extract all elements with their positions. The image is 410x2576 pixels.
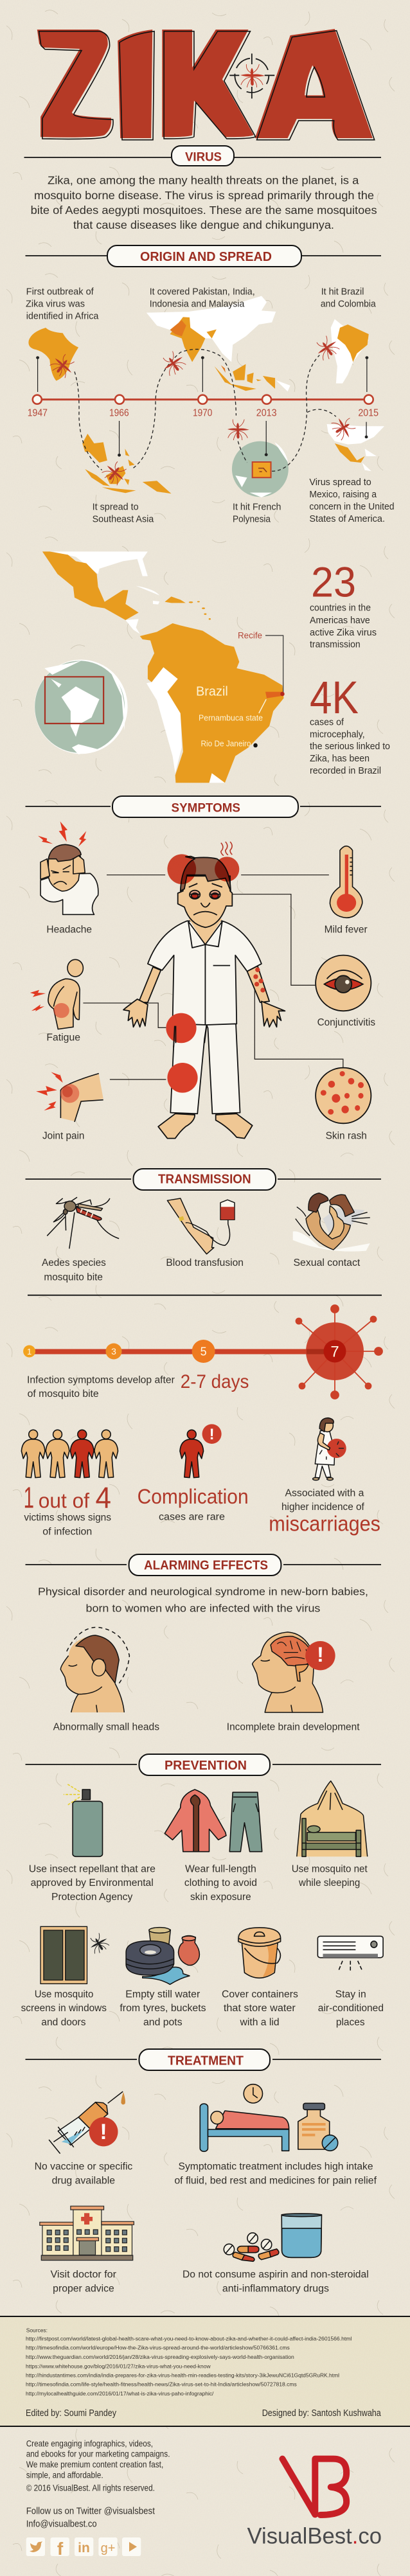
icon: repellent spray [64, 1784, 103, 1856]
panel: Americas map and stats [35, 551, 390, 783]
shirt [148, 921, 262, 1025]
stat: 23 countries: countries in the [310, 603, 371, 614]
panel: symptoms [26, 796, 381, 1142]
arrow: dashed spread path [75, 350, 336, 471]
map: South America [331, 319, 369, 384]
icon: window screen [40, 1926, 111, 1984]
text: treatment row 1: Symptomatic treatment includes high intake [179, 2162, 373, 2172]
text: map labels: Rio De Janeiro [201, 739, 251, 749]
text: miscarriages: higher incidence of [281, 1502, 364, 1513]
text: prevention row 1: while sleeping [298, 1878, 360, 1888]
text: timeline captions: It hit Brazil [321, 287, 364, 297]
text: timeline captions: Zika virus was [26, 299, 85, 309]
text: symptom labels: Joint pain [42, 1131, 84, 1142]
text block: VisualBest about: and ebooks for your marketing campaigns. [26, 2449, 170, 2459]
text: incubation period: of mosquito bite [28, 1389, 99, 1399]
text: timeline captions [26, 287, 395, 524]
text: credits: Edited by: Soumi Pandey [26, 2408, 116, 2419]
text: map labels: Pernambuca state [199, 713, 263, 723]
timeline: years axis [28, 395, 379, 419]
icon: pills and water glass [224, 2214, 321, 2261]
arms [123, 966, 285, 1027]
feet [158, 1114, 253, 1139]
stat: 4K cases: cases of [310, 717, 344, 727]
stat: 4K cases: the serious linked to [310, 742, 390, 752]
icon: syringe with alert: ! [100, 2120, 107, 2144]
text: 1 out of 4 [24, 1481, 111, 1537]
icon: Aedes mosquito [47, 1197, 119, 1248]
text: credits [26, 2408, 381, 2419]
text: prevention row 2 [21, 1989, 384, 2028]
text: prevention row 2: air-conditioned [318, 2003, 384, 2014]
map: Africa [28, 328, 78, 381]
text: prevention row 2: places [336, 2017, 365, 2028]
text block: virus intro: that cause diseases like dengue and chikungunya. [73, 218, 334, 231]
face lines [189, 884, 222, 915]
text: symptom labels [42, 925, 375, 1142]
text: timeline captions: States of America. [309, 514, 385, 524]
text block: sources: http://www.theguardian.com/world/2016/jan/28/zika-virus-spreading-explosively-says-world-health-organisation [26, 2354, 294, 2360]
text: transmission labels: Aedes species [42, 1257, 106, 1268]
text block: virus intro: bite of Aedes aegypti mosquitoes. These are the same mosquitoes [31, 204, 377, 217]
text: treatment row 2: anti-inflammatory drugs [222, 2284, 329, 2295]
text block: VisualBest about: Info@visualbest.co [26, 2519, 97, 2530]
heading: virus: VIRUS [185, 150, 222, 164]
text: prevention row 2: Stay in [335, 1989, 366, 2000]
text block: sources: http://firstpost.com/world/latest-global-health-scare-what-you-need-to-know-about-zika-and-whether-it-could-affect-india-2601566.html [26, 2335, 352, 2341]
stat: 4K cases: recorded in Brazil [310, 766, 381, 776]
text: prevention row 2: with a lid [239, 2017, 280, 2028]
text: treatment row 2: Do not consume aspirin and non-steroidal [183, 2269, 369, 2280]
icon: red eye [316, 955, 371, 1011]
icon: bed rest and medicine [200, 2084, 338, 2151]
text: prevention row 1: approved by Environmental [31, 1878, 154, 1888]
text block: sources: https://www.whitehouse.gov/blog/2016/01/27/zika-virus-what-you-need-know [26, 2363, 211, 2369]
text: map labels: Recife [238, 630, 262, 640]
text block: sources: http://timesofindia.com/life-style/health-fitness/health-news/Zika-virus-set-to-hit-India/articleshow/50727818.cms [26, 2381, 297, 2388]
heading: transmission: TRANSMISSION [158, 1173, 251, 1187]
stat: 23 countries: Americas have [310, 616, 370, 626]
heading: treatment: TREATMENT [168, 2054, 244, 2068]
stat: 23 countries [310, 558, 377, 650]
text: 1 out of 4: out of [39, 1489, 89, 1513]
icon: baby with underdeveloped brain: ! [317, 1643, 324, 1666]
text: transmission labels: Blood transfusion [166, 1257, 244, 1268]
text block: VisualBest about [26, 2438, 170, 2530]
stat: 23 countries: active Zika virus [310, 628, 377, 638]
text: miscarriages: Associated with a [285, 1488, 364, 1498]
icons: social media: f [57, 2539, 64, 2559]
text: transmission labels [42, 1257, 361, 1283]
icon: syringe with alert [49, 2092, 125, 2154]
text: 1 out of 4: victims shows signs [24, 1513, 111, 1523]
text: miscarriages [269, 1488, 380, 1536]
icon: pregnant woman [313, 1418, 346, 1480]
icon: headache [38, 821, 98, 914]
text block: sources: Sources: [26, 2327, 48, 2333]
text: symptom labels: Conjunctivitis [317, 1017, 375, 1028]
text block: sources: http://hindustantimes.com/india/india-prepares-for-zika-virus-health-min-readies-testing-kits/story-3ikJewuNCi61Gqtd5GRuRK.html [26, 2372, 339, 2378]
eyes [190, 891, 220, 899]
timeline stems [38, 358, 367, 455]
text: timeline captions: and Colombia [321, 299, 377, 309]
text: prevention row 2: from tyres, buckets [120, 2003, 206, 2014]
text: miscarriages: miscarriages [269, 1512, 380, 1536]
logo: VB mark [282, 2459, 346, 2515]
text: symptom labels: Fatigue [46, 1032, 80, 1043]
text: timeline captions: Mexico, raising a [309, 490, 377, 500]
title: ZIKA lettering [37, 29, 375, 140]
icon: crosshair with mosquito [229, 53, 274, 98]
text: prevention row 1: clothing to avoid [184, 1878, 257, 1888]
icons: social media [26, 2537, 141, 2559]
icon: person with alert [180, 1424, 222, 1478]
panel: treatment [26, 2049, 381, 2295]
text: incubation period [27, 1371, 249, 1399]
icon: thermometer [330, 846, 362, 918]
timeline: years axis: 1970 [193, 408, 212, 419]
text: complication [138, 1485, 249, 1523]
text block: VisualBest about: Create engaging infographics, videos, [26, 2438, 153, 2448]
text block: virus intro: mosquito borne disease. The virus is spread primarily through the [34, 189, 374, 202]
text: treatment row 1 [35, 2162, 377, 2186]
text: map labels [196, 630, 263, 749]
text: transmission labels: Sexual contact [293, 1257, 361, 1268]
text block: effects intro: born to women who are infected with the virus [86, 1602, 320, 1614]
text: complication: Complication [138, 1485, 249, 1508]
map: North America [327, 424, 384, 471]
icon: baby with underdeveloped brain [253, 1632, 335, 1712]
text: 1 out of 4: 1 [24, 1481, 34, 1515]
icon: mosquito net over bed [297, 1781, 368, 1856]
text block: VisualBest about: © 2016 VisualBest. All rights reserved. [26, 2483, 155, 2493]
illustration: sick man [123, 842, 285, 1139]
stat: 23 countries: transmission [310, 640, 361, 650]
text: timeline captions: It covered Pakistan, India, [150, 287, 255, 297]
text: treatment row 2: Visit doctor for [50, 2269, 116, 2280]
text: timeline captions: Virus spread to [309, 477, 371, 488]
chart: incubation days scale: 7 [330, 1344, 339, 1361]
text block: sources: http://mylocalhealthguide.com/2016/01/17/what-is-zika-virus-paho-infographic/ [26, 2390, 214, 2397]
stat: 23 countries: 23 [311, 558, 356, 605]
text: treatment row 2: proper advice [53, 2284, 114, 2295]
panel: alarming effects [26, 1554, 381, 1732]
icons: social media: in [78, 2541, 90, 2555]
heading: origin and spread [26, 245, 381, 267]
text: symptom labels: Mild fever [325, 925, 368, 936]
icon: fatigue [30, 959, 83, 1029]
text: prevention row 2: screens in windows [21, 2003, 107, 2014]
heading: virus [24, 146, 381, 166]
panel: transmission [21, 1169, 382, 1537]
icon: hospital [40, 2206, 134, 2261]
timeline: years axis: 2015 [358, 408, 379, 419]
icon: four people [21, 1430, 118, 1478]
text: prevention row 1: Use insect repellant that are [29, 1863, 156, 1874]
text: prevention row 2: that store water [224, 2003, 296, 2014]
timeline: years axis: 1947 [28, 408, 48, 419]
heading: prevention [26, 1754, 381, 1775]
text: timeline captions: concern in the United [309, 502, 395, 512]
icon: knee joint [36, 1072, 103, 1122]
text: timeline captions: It hit French [233, 502, 281, 512]
text block: effects intro [38, 1585, 368, 1614]
trousers [170, 1024, 240, 1114]
text: 1 out of 4: 4 [95, 1481, 111, 1515]
text: prevention row 1: Protection Agency [51, 1892, 133, 1903]
text block: sources [26, 2327, 352, 2397]
text: timeline captions: Southeast Asia [93, 514, 154, 524]
text: timeline captions: It spread to [93, 502, 139, 512]
icon: full-length clothes [165, 1790, 262, 1852]
text block: VisualBest about: We make premium content creation fast, [26, 2459, 163, 2469]
panel: origin and spread [26, 245, 395, 524]
icon: couple [293, 1193, 370, 1252]
text: timeline captions: Indonesia and Malaysia [150, 299, 245, 309]
text: effect labels [53, 1721, 360, 1732]
text: timeline captions: Polynesia [233, 514, 271, 524]
heat waves [221, 842, 232, 856]
chart: incubation days scale: 3 [111, 1346, 116, 1356]
text: incubation period: 2-7 days [181, 1371, 249, 1392]
heading: transmission [26, 1169, 381, 1190]
heading: origin and spread: ORIGIN AND SPREAD [140, 250, 272, 264]
text: complication: cases are rare [159, 1512, 225, 1523]
text: transmission labels: mosquito bite [44, 1272, 103, 1283]
icon: lidded bucket [238, 1928, 281, 1978]
text block: virus intro: Zika, one among the many health threats on the planet, is a [48, 174, 359, 187]
stat: 4K cases: 4K [310, 673, 359, 724]
icon: blood transfusion [167, 1198, 235, 1254]
stat: 4K cases: Zika, has been [310, 754, 370, 764]
text block: virus intro [31, 174, 377, 231]
panel: title and virus intro [24, 29, 381, 231]
heading: prevention: PREVENTION [165, 1759, 247, 1773]
text: treatment row 2 [50, 2269, 369, 2295]
map: French Polynesia globe [232, 441, 289, 497]
joint pain circles [166, 1013, 198, 1093]
connector lines [83, 875, 343, 1079]
text: symptom labels: Headache [46, 925, 92, 936]
icon: mosquitoes on route [48, 333, 358, 488]
timeline: years axis: 2013 [256, 408, 277, 419]
panel: footer [26, 2438, 382, 2559]
text: effect labels: Incomplete brain development [227, 1721, 360, 1732]
icon: person with alert: ! [209, 1426, 215, 1443]
text: timeline captions: First outbreak of [26, 287, 94, 297]
map: Latin America [42, 551, 285, 783]
text: prevention row 2: and pots [143, 2017, 183, 2028]
text: 1 out of 4: of infection [42, 1526, 92, 1537]
text: prevention row 1: Wear full-length [185, 1863, 256, 1874]
text block: VisualBest about: simple, and affordable. [26, 2469, 103, 2480]
text: prevention row 1 [29, 1863, 368, 1903]
head [178, 876, 232, 927]
text: incubation period: Infection symptoms develop after [27, 1374, 175, 1385]
text: map labels: Brazil [196, 684, 228, 699]
text block: sources: http://timesofindia.com/world/europe/How-the-Zika-virus-spread-around-the-world/articleshow/50766361.cms [26, 2345, 290, 2351]
chart: incubation days scale [23, 1305, 382, 1399]
text: effect labels: Abnormally small heads [53, 1721, 159, 1732]
panel: prevention [21, 1754, 384, 2028]
logo: VisualBest wordmark: VisualBest.co [247, 2523, 382, 2548]
text: treatment row 1: No vaccine or specific [35, 2162, 133, 2172]
heading: symptoms: SYMPTOMS [171, 801, 240, 815]
map: Southeast Asia [82, 434, 172, 493]
text: treatment row 1: drug available [52, 2175, 115, 2186]
text: prevention row 1: skin exposure [190, 1892, 251, 1903]
text block: effects intro: Physical disorder and neurological syndrome in new-born babies, [38, 1585, 368, 1597]
heading: symptoms [26, 796, 381, 817]
text block: VisualBest about: Follow us on Twitter @visualsbest [26, 2506, 156, 2517]
text: treatment row 1: of fluid, bed rest and medicines for pain relief [174, 2175, 377, 2186]
text: prevention row 1: Use mosquito net [292, 1863, 368, 1874]
heading: alarming effects: ALARMING EFFECTS [144, 1559, 268, 1573]
map group: spread maps [28, 296, 384, 497]
virus spikes [296, 1305, 382, 1399]
icon: tyres, bucket and pot [126, 1928, 199, 1984]
text: symptom labels: Skin rash [326, 1131, 367, 1142]
text: timeline captions: identified in Africa [26, 311, 99, 321]
icons: social media: g+ [101, 2541, 115, 2555]
chart: incubation days scale: 1 [27, 1347, 31, 1356]
stat: 4K cases [310, 673, 390, 776]
hair [181, 857, 231, 891]
icon: air conditioner [317, 1936, 383, 1971]
text: prevention row 2: Use mosquito [35, 1989, 93, 2000]
text: prevention row 2: Cover containers [222, 1989, 298, 2000]
stat: 4K cases: microcephaly, [310, 729, 365, 740]
heading: alarming effects [26, 1554, 381, 1576]
text: prevention row 2: Empty still water [125, 1989, 200, 2000]
panel: sources and credits [0, 2316, 410, 2426]
heading: treatment [26, 2049, 381, 2070]
timeline: years axis: 1966 [109, 408, 129, 419]
text: credits: Designed by: Santosh Kushwaha [262, 2408, 381, 2419]
pain circles [167, 854, 239, 884]
text: prevention row 2: and doors [41, 2017, 86, 2028]
map: locator globe [35, 660, 128, 754]
chart: incubation days scale: 5 [201, 1346, 207, 1358]
rash on arm [253, 968, 265, 993]
icon: baby with small head [60, 1627, 129, 1712]
map: Asia [147, 296, 290, 391]
icon: skin rash [316, 1068, 371, 1123]
